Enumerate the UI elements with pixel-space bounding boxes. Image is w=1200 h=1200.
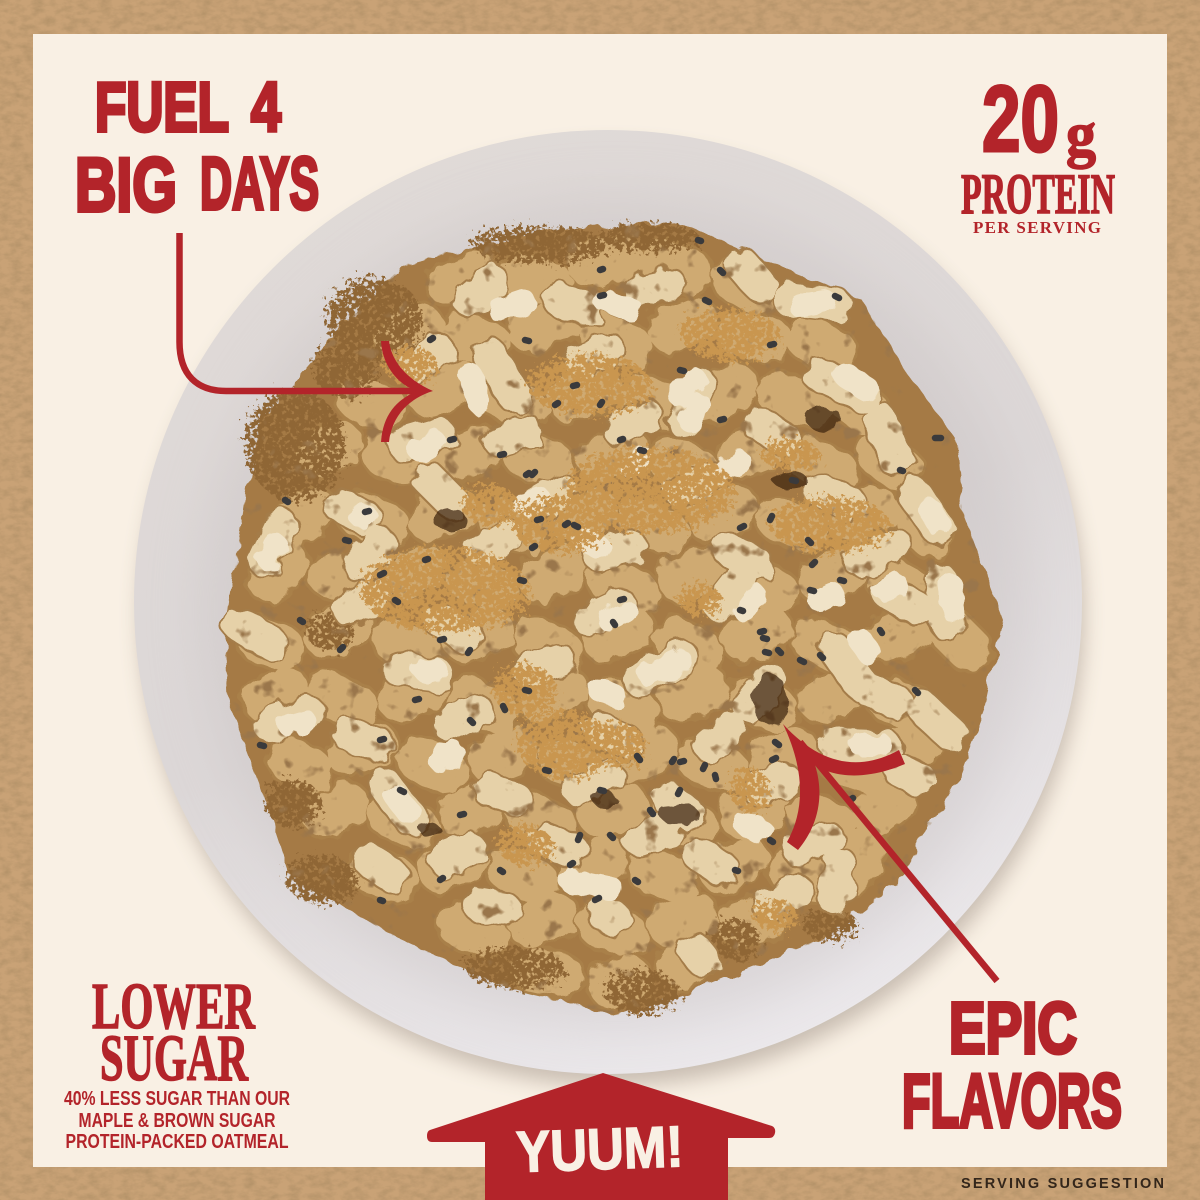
oatmeal mass (225, 222, 1003, 1016)
big number: 20: 20 (982, 66, 1059, 171)
callout: lower sugar (64, 970, 290, 1153)
cream flake layer (240, 265, 951, 960)
dark gaps in the oats (420, 408, 843, 838)
pale flake highlights (269, 300, 954, 888)
callout: epic flavors (902, 989, 1122, 1144)
white bowl (134, 130, 1082, 1074)
shadow cracks between flakes (225, 222, 1003, 1016)
arrow head (381, 341, 433, 442)
arrow: epic flavors to oats (783, 724, 997, 981)
callout: 20g protein (961, 66, 1115, 237)
serving suggestion note: SERVING SUGGESTION (961, 1176, 1164, 1192)
callout: fuel 4 big days (75, 68, 319, 228)
chia seeds (260, 240, 941, 901)
oatmeal base (225, 222, 1003, 1016)
unit: g: g (1066, 101, 1096, 169)
bowl of oatmeal (134, 130, 1084, 1086)
label: per serving: PER SERVING (973, 218, 1101, 237)
golden sugar patches (360, 309, 890, 931)
bowl shadow (140, 146, 1084, 1086)
description: MAPLE & BROWN SUGAR (78, 1110, 276, 1132)
arrow shaft (800, 742, 997, 981)
heading word: big: BIG (75, 143, 177, 228)
label: yuum: YUUM! (515, 1114, 684, 1185)
heading word: days: DAYS (200, 142, 319, 225)
arrow: fuel callout to oats (180, 233, 433, 442)
description (64, 1088, 290, 1153)
arrow shaft (180, 233, 420, 391)
heading line: lower: LOWER (92, 970, 256, 1043)
brown sugar around the rim (245, 224, 858, 1014)
yuum arrow badge (427, 1073, 775, 1200)
arrow shape (427, 1073, 775, 1200)
heading word: 4: 4 (251, 68, 281, 146)
tan flake layer (260, 259, 968, 985)
arrow head (783, 724, 905, 850)
bowl inner shading (200, 195, 1030, 1025)
description: 40% LESS SUGAR THAN OUR (64, 1088, 290, 1110)
heading line: sugar: SUGAR (100, 1022, 249, 1095)
heading line: epic: EPIC (949, 989, 1077, 1069)
heading word: fuel: FUEL (95, 68, 229, 146)
description: PROTEIN-PACKED OATMEAL (66, 1131, 288, 1153)
